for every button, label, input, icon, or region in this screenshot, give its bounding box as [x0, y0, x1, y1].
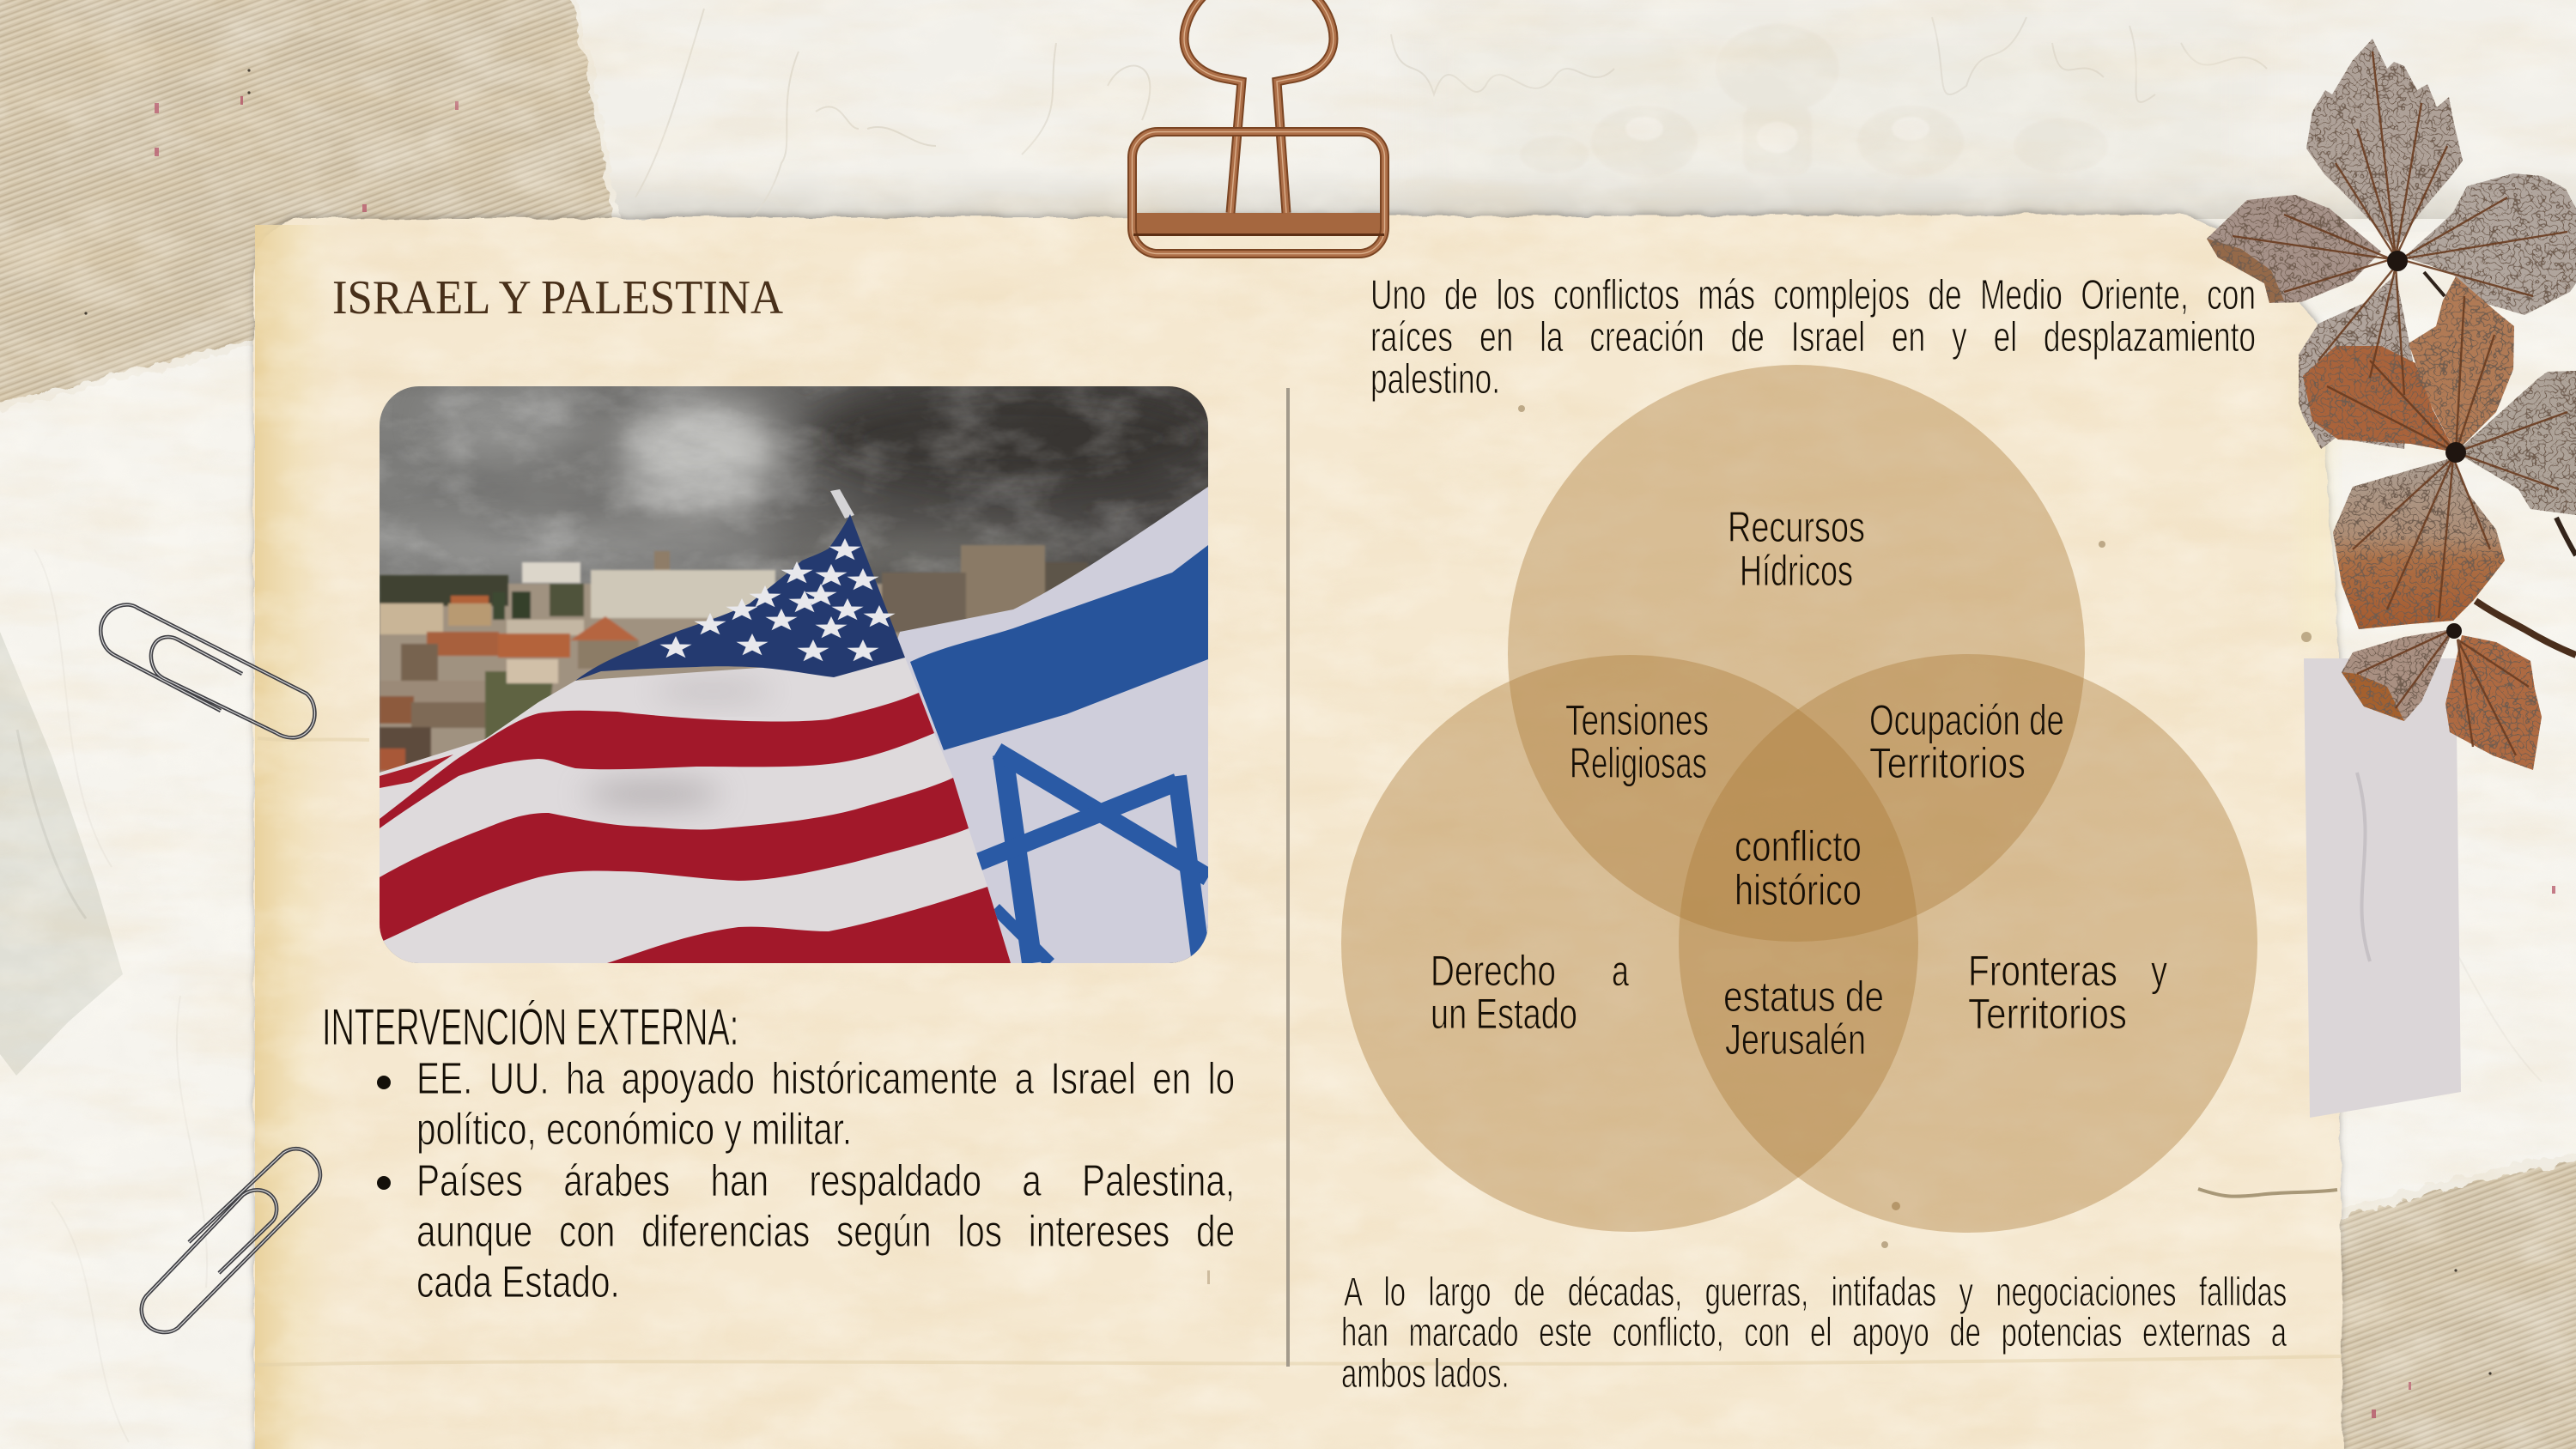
venn label: derecho a un estado: un Estado — [1431, 990, 1577, 1038]
heading: intervencion externa: INTERVENCIÓN EXTERNA: — [322, 998, 738, 1056]
photo: US flag — [380, 489, 1011, 963]
venn label: ocupacion de territorios: Territorios — [1869, 739, 2026, 787]
photo: US and Israeli flags over city — [361, 386, 1219, 963]
title: ISRAEL Y PALESTINA — [332, 271, 784, 324]
bullet dot two — [377, 1176, 391, 1190]
bullet dot one — [377, 1076, 391, 1089]
list: bullet points: cada Estado. — [416, 1258, 620, 1307]
venn: circle derecho — [1341, 655, 1918, 1232]
paragraph: top intro: raíces en la creación de Israel en y el desplazamiento — [1370, 314, 2256, 361]
venn label: estatus de jerusalen: estatus de — [1723, 973, 1884, 1021]
divider — [1286, 388, 1290, 1367]
venn label: estatus de jerusalen — [1723, 973, 1884, 1064]
list: bullet points: EE. UU. ha apoyado históricamente a Israel en lo — [416, 1054, 1235, 1104]
panel: aged paper sheet — [253, 215, 2342, 1449]
tape: left — [0, 632, 123, 1076]
illustration: dried leaves — [2207, 39, 2576, 770]
paragraph: top intro — [1370, 272, 2256, 403]
venn label: tensiones religiosas — [1565, 696, 1709, 787]
venn label: tensiones religiosas: Tensiones — [1565, 696, 1709, 744]
paragraph: top intro: Uno de los conflictos más complejos de Medio Oriente, con — [1370, 272, 2256, 318]
icon: paperclip top — [100, 604, 314, 737]
venn label: conflicto historico — [1735, 822, 1862, 914]
icon: copper binder clip — [1132, 0, 1385, 254]
venn label: fronteras y territorios: y — [2151, 947, 2167, 995]
photo: city — [380, 545, 1088, 781]
venn label: fronteras y territorios — [1968, 947, 2167, 1038]
background: bottom right burlap paper — [2339, 1154, 2576, 1449]
tape: right — [2304, 658, 2461, 1118]
paragraph: top intro: palestino. — [1370, 356, 1500, 403]
venn label: ocupacion de territorios — [1869, 696, 2064, 787]
venn label: fronteras y territorios: Fronteras — [1968, 947, 2117, 995]
venn label: recursos hidricos: Hídricos — [1740, 547, 1853, 595]
venn label: derecho a un estado — [1431, 947, 1629, 1038]
list: bullet points: Países árabes han respaldado a Palestina, — [416, 1156, 1235, 1206]
venn label: recursos hidricos — [1728, 503, 1865, 595]
venn label: conflicto historico: conflicto — [1735, 822, 1862, 870]
photo: Israeli flag — [893, 487, 1208, 963]
venn label: conflicto historico: histórico — [1735, 866, 1862, 914]
icon: paperclip bottom — [142, 1149, 320, 1332]
paragraph: bottom conclusion: ambos lados. — [1341, 1350, 1510, 1396]
paragraph: bottom conclusion — [1341, 1269, 2287, 1396]
venn label: derecho a un estado: a — [1612, 947, 1629, 995]
background: top left burlap paper — [0, 0, 653, 429]
venn label: tensiones religiosas: Religiosas — [1570, 739, 1707, 787]
venn label: ocupacion de territorios: Ocupación de — [1869, 696, 2064, 744]
venn label: estatus de jerusalen: Jerusalén — [1725, 1016, 1866, 1064]
venn label: derecho a un estado: Derecho — [1431, 947, 1556, 995]
venn label: fronteras y territorios: Territorios — [1968, 990, 2127, 1038]
paragraph: bottom conclusion: A lo largo de décadas, guerras, intifadas y negociaciones fallidas — [1344, 1269, 2287, 1314]
list: bullet points: político, económico y militar. — [416, 1105, 852, 1155]
venn label: recursos hidricos: Recursos — [1728, 503, 1865, 551]
background: top handwritten paper — [550, 0, 2576, 232]
venn: circle fronteras — [1679, 654, 2257, 1233]
venn: circle recursos — [1508, 365, 2085, 942]
paragraph: bottom conclusion: han marcado este conflicto, con el apoyo de potencias externas a — [1341, 1309, 2287, 1355]
list: bullet points — [377, 1054, 1235, 1307]
venn diagram — [1341, 365, 2257, 1233]
list: bullet points: aunque con diferencias según los intereses de — [416, 1207, 1235, 1257]
